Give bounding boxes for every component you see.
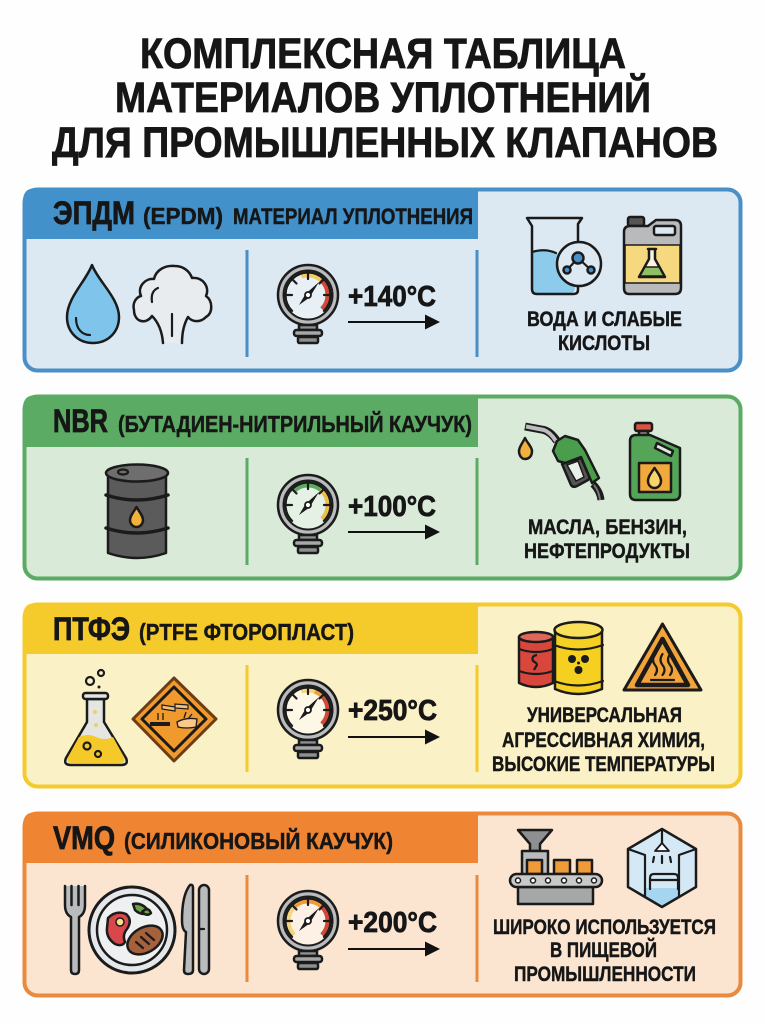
icon: beaker with molecule <box>527 218 601 294</box>
title: КОМПЛЕКСНАЯ ТАБЛИЦА <box>140 30 626 78</box>
panel: EPDM <box>23 188 740 370</box>
description: universal chemicals: УНИВЕРСАЛЬНАЯ <box>527 704 682 727</box>
header: PTFE: ПТФЭ <box>53 611 130 647</box>
header: VMQ: VMQ <box>53 820 115 856</box>
icon: plate with meat <box>89 887 175 973</box>
panel: NBR <box>23 395 740 578</box>
icon: chemistry flask <box>65 670 127 765</box>
description: food industry: В ПИЩЕВОЙ <box>550 938 657 962</box>
icon: fork <box>65 886 85 974</box>
description: food industry <box>493 916 716 986</box>
icon: oil barrel <box>106 464 168 558</box>
icon: water drop <box>67 265 119 343</box>
description: oils and petrol: МАСЛА, БЕНЗИН, <box>528 516 687 539</box>
icon: fuel nozzle <box>519 426 601 500</box>
temperature: +140°C: +140°C <box>348 281 436 313</box>
title: МАТЕРИАЛОВ УПЛОТНЕНИЙ <box>115 73 651 122</box>
header: VMQ: (СИЛИКОНОВЫЙ КАУЧУК) <box>124 827 393 854</box>
header: PTFE <box>23 603 478 654</box>
temperature: +250°C: +250°C <box>348 695 437 727</box>
icon: hot surface warning <box>624 624 701 690</box>
description: food industry: ШИРОКО ИСПОЛЬЗУЕТСЯ <box>493 916 716 939</box>
icon: red barrel <box>519 632 553 687</box>
arrow <box>348 730 440 744</box>
header: NBR <box>23 395 478 447</box>
description: food industry: ПРОМЫШЛЕННОСТИ <box>514 963 696 986</box>
icon: gauge <box>278 680 338 758</box>
icon: gauge <box>278 891 338 969</box>
header: EPDM: (EPDM) <box>143 203 223 229</box>
arrow <box>348 524 440 540</box>
icon: canister with flask <box>624 217 681 294</box>
icon: gauge <box>278 265 338 343</box>
header: EPDM: ЭПДМ <box>53 195 135 231</box>
header: NBR: (БУТАДИЕН-НИТРИЛЬНЫЙ КАУЧУК) <box>118 410 472 437</box>
icon: table knife <box>182 885 193 974</box>
title <box>52 30 718 167</box>
icon: yellow radioactive barrel <box>554 622 603 694</box>
panel: VMQ <box>23 812 740 996</box>
temperature: +100°C: +100°C <box>348 491 436 523</box>
header: EPDM <box>23 188 478 239</box>
header: NBR: NBR <box>53 403 108 439</box>
header: PTFE: (PTFE ФТОРОПЛАСТ) <box>139 619 354 645</box>
description: oils and petrol: НЕФТЕПРОДУКТЫ <box>524 540 690 563</box>
description: water and weak acids <box>527 308 682 355</box>
arrow <box>348 942 440 956</box>
description: oils and petrol <box>524 516 690 563</box>
description: universal chemicals: АГРЕССИВНАЯ ХИМИЯ, <box>502 729 705 752</box>
icon: steam cloud <box>134 266 211 343</box>
icon: food conveyor <box>510 830 602 904</box>
header: VMQ <box>23 812 478 863</box>
panel: PTFE <box>23 603 740 786</box>
icon: second knife <box>199 885 209 974</box>
description: universal chemicals <box>492 704 715 776</box>
icon: gauge <box>278 475 338 553</box>
icon: clean room <box>628 829 696 907</box>
description: water and weak acids: ВОДА И СЛАБЫЕ <box>527 308 682 331</box>
header: EPDM: МАТЕРИАЛ УПЛОТНЕНИЯ <box>233 204 473 229</box>
temperature: +200°C: +200°C <box>348 907 437 939</box>
icon: green canister <box>630 423 680 500</box>
description: water and weak acids: КИСЛОТЫ <box>558 332 650 355</box>
description: universal chemicals: ВЫСОКИЕ ТЕМПЕРАТУРЫ <box>492 753 715 776</box>
arrow <box>348 314 440 330</box>
icon: corrosive hazard sign <box>133 678 216 761</box>
